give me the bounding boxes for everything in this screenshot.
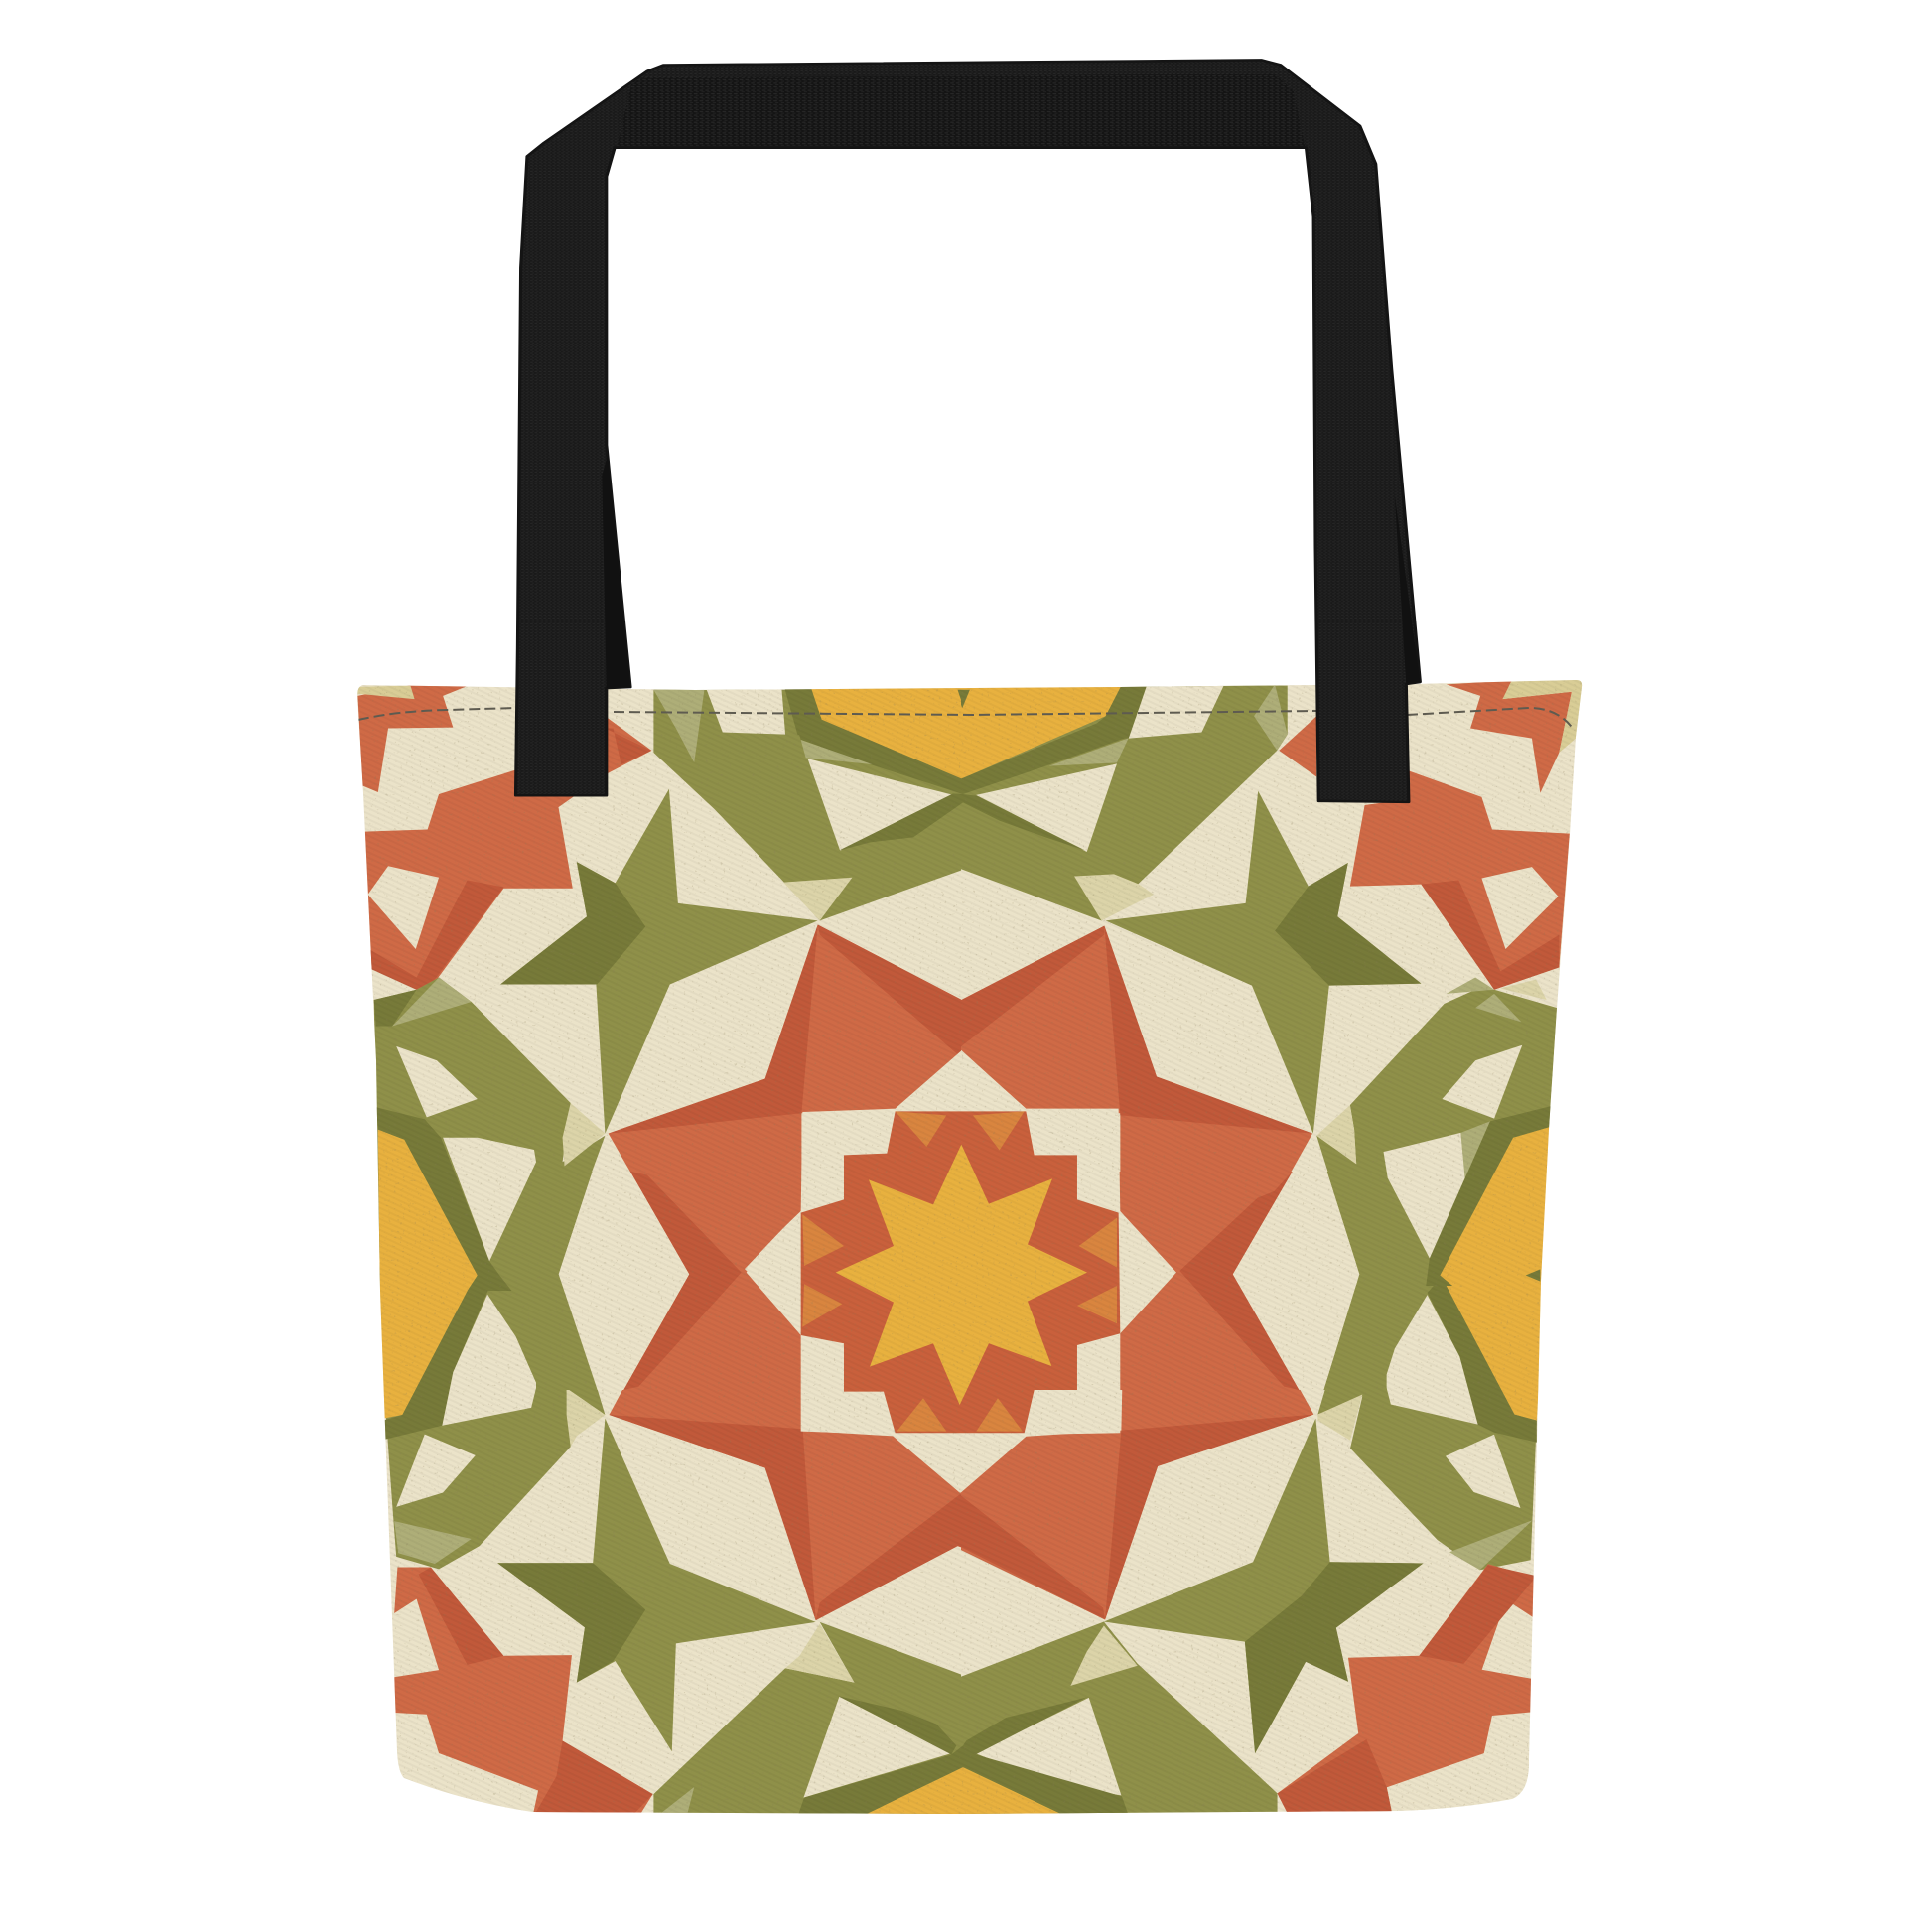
medallion cream frame bbox=[747, 1050, 1176, 1434]
top centre crossing bands bbox=[794, 718, 1132, 851]
handle strap bbox=[516, 60, 1420, 802]
black handles bbox=[516, 60, 1420, 802]
right red star tip and cream diamond bbox=[1112, 1172, 1387, 1390]
tote bag body bbox=[338, 665, 1608, 1827]
fabric twill texture bbox=[338, 665, 1608, 1827]
central medallion bbox=[747, 1050, 1176, 1434]
pattern: bottom left quadrant bbox=[378, 1287, 973, 1819]
top hem stitching bbox=[358, 708, 1574, 730]
medallion red stepped border bbox=[801, 1111, 1120, 1433]
pattern: top left quadrant bbox=[357, 684, 973, 1291]
pattern: bottom right quadrant bbox=[953, 1277, 1545, 1817]
paper speckles bbox=[338, 665, 1608, 1827]
bottom centre crossing bands bbox=[797, 1696, 1129, 1817]
left red star tip and cream diamond bbox=[536, 1172, 801, 1390]
medallion yellow star bbox=[836, 1145, 1087, 1405]
medallion orange triangles bbox=[802, 1111, 1117, 1432]
handle top inner band bbox=[618, 74, 1305, 146]
handle back strap right shade bbox=[1395, 495, 1420, 684]
pattern: top right quadrant bbox=[953, 677, 1585, 1291]
handle back strap left shade bbox=[602, 455, 630, 688]
